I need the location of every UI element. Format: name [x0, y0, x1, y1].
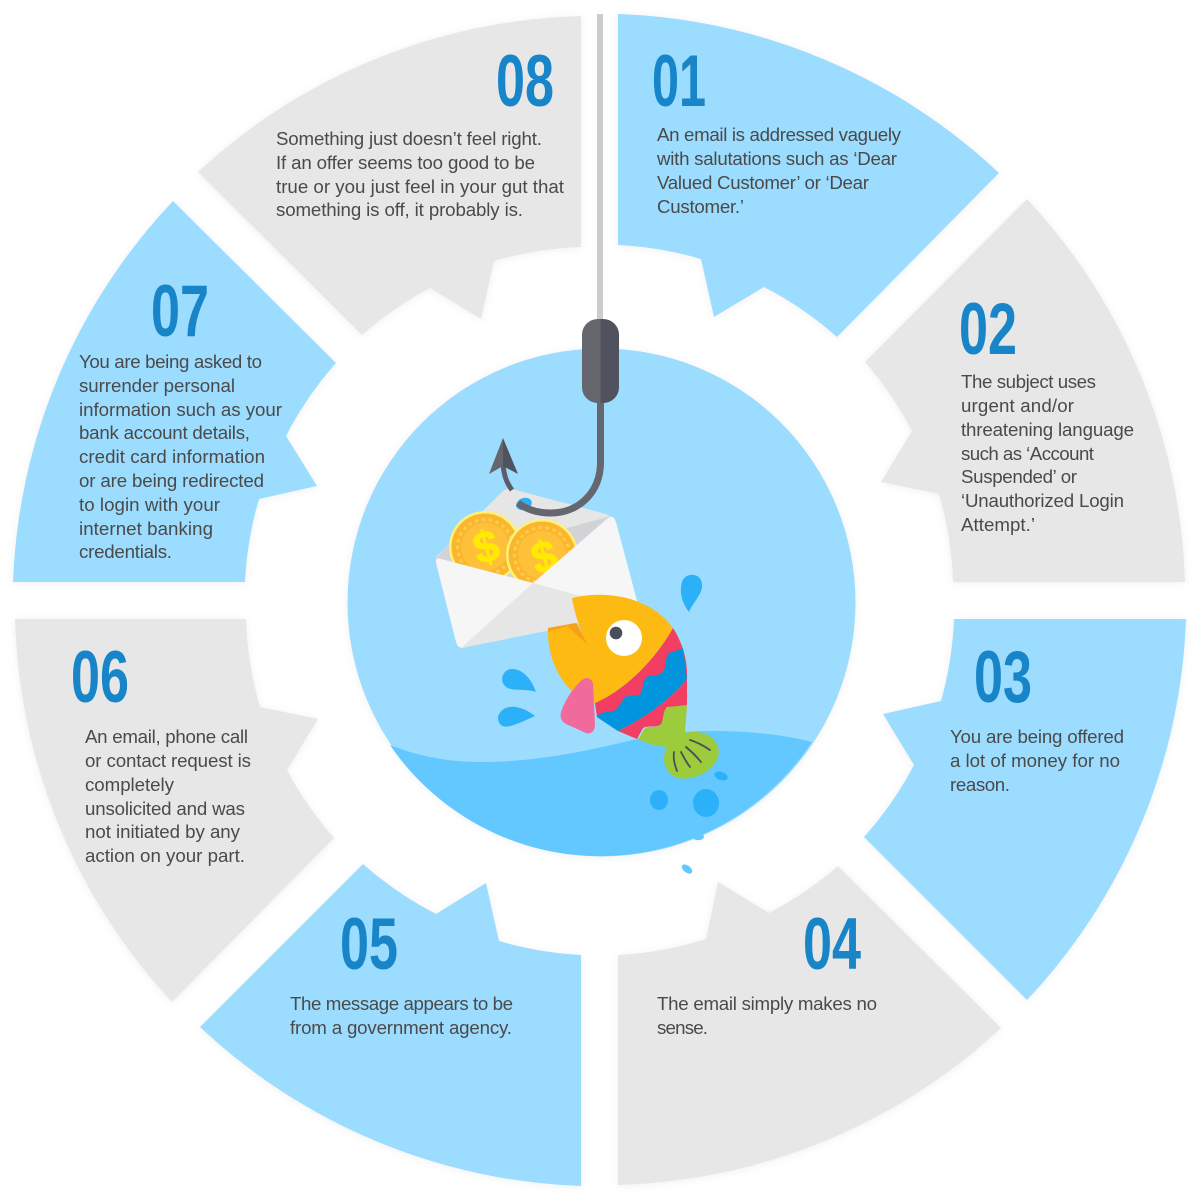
envelope [436, 489, 640, 648]
hook [489, 319, 619, 513]
text 02: The subject uses [961, 371, 1096, 392]
text 07: You are being asked to [79, 351, 262, 372]
text 06: completely [85, 774, 175, 795]
text 04: The email simply makes no [657, 993, 877, 1014]
text 01: Valued Customer’ or ‘Dear [657, 172, 869, 193]
segment 06 [15, 619, 334, 1002]
number 03: 03 [974, 637, 1032, 718]
number 05: 05 [340, 904, 398, 985]
envelope inside shade [436, 516, 611, 583]
text 07: or are being redirected [79, 470, 264, 491]
text 07: surrender personal [79, 375, 235, 396]
text 06: not initiated by any [85, 821, 241, 842]
water [390, 731, 812, 856]
text 05: from a government agency. [290, 1017, 512, 1038]
number 01: 01 [652, 41, 706, 122]
text 08: true or you just feel in your gut that [276, 176, 565, 197]
coins [449, 511, 576, 583]
coin 2: $ [526, 531, 563, 584]
panel: 06 [15, 619, 334, 1002]
hole in envelope [514, 496, 534, 512]
text 03: reason. [950, 774, 1010, 795]
number 08: 08 [496, 41, 554, 122]
text 06 [85, 726, 251, 866]
text 07: to login with your [79, 494, 220, 515]
text 04: sense. [657, 1017, 708, 1038]
text 06: action on your part. [85, 845, 245, 866]
envelope back [436, 489, 636, 648]
body and tail green [638, 705, 719, 779]
panel: 05 [200, 864, 581, 1186]
text 07 [79, 351, 282, 562]
text 05: The message appears to be [290, 993, 513, 1014]
number 02: 02 [959, 289, 1017, 370]
coin 1: $ [468, 521, 505, 574]
text 08: Something just doesn’t feel right. [276, 128, 542, 149]
text 05 [290, 993, 513, 1038]
text 07: internet banking [79, 518, 213, 539]
text 02: Attempt.’ [961, 514, 1035, 535]
segment 01 [618, 14, 999, 337]
eye [606, 620, 642, 656]
text 03 [950, 726, 1124, 795]
segment 03 [864, 619, 1186, 1000]
pupil [610, 627, 622, 639]
tongue [561, 678, 595, 733]
number 07: 07 [151, 271, 209, 352]
body lower red band [618, 679, 687, 739]
droplet top right [681, 575, 702, 612]
water droplets [498, 575, 729, 875]
panel: 03 [864, 619, 1186, 1000]
envelope front [436, 517, 640, 648]
splash drops [650, 790, 668, 810]
panel: 02 [865, 199, 1185, 582]
droplet left lower [498, 707, 535, 727]
droplet left upper [502, 669, 536, 692]
text 07: information such as your [79, 399, 282, 420]
text 07: credentials. [79, 541, 172, 562]
text 02: threatening language [961, 419, 1134, 440]
number 04: 04 [803, 904, 861, 985]
text 02: urgent and/or [961, 395, 1074, 416]
text 08: something is off, it probably is. [276, 199, 523, 220]
text 02: Suspended’ or [961, 466, 1077, 487]
rope [597, 14, 603, 324]
text 01 [656, 124, 902, 217]
body blue band [597, 648, 687, 731]
text 02: such as ‘Account [961, 443, 1095, 464]
segment 05 [200, 864, 581, 1186]
text 01: Customer.’ [657, 196, 744, 217]
text 08 [276, 128, 565, 220]
text 03: a lot of money for no [950, 750, 1120, 771]
text 02: ‘Unauthorized Login [961, 490, 1124, 511]
segment 07 [13, 201, 336, 582]
panel: 07 [13, 201, 336, 582]
number 06: 06 [71, 637, 129, 718]
text 08: If an offer seems too good to be [276, 152, 535, 173]
text 04 [657, 993, 877, 1038]
segment 08 [198, 16, 581, 335]
central illustration [348, 319, 856, 875]
text 03: You are being offered [950, 726, 1124, 747]
text 06: unsolicited and was [85, 798, 245, 819]
hook line [518, 400, 600, 513]
barb head [489, 438, 503, 474]
body upper red band [595, 628, 687, 731]
text 01: with salutations such as ‘Dear [656, 148, 897, 169]
hook barb stem [503, 464, 512, 490]
segment 04 [618, 866, 1001, 1185]
panel: 01 [618, 14, 999, 337]
text 06: or contact request is [85, 750, 251, 771]
hook sinker [582, 319, 600, 403]
inner mouth [548, 623, 588, 645]
tail lines [674, 740, 710, 771]
text 02 [961, 371, 1134, 535]
panel: 04 [618, 866, 1001, 1185]
text 07: credit card information [79, 446, 265, 467]
text 06: An email, phone call [85, 726, 248, 747]
text 01: An email is addressed vaguely [657, 124, 902, 145]
envelope lower flap [461, 583, 640, 648]
head [548, 595, 673, 703]
panel: 08 [198, 16, 581, 335]
fish [548, 595, 719, 779]
segment 02 [865, 199, 1185, 582]
circle: sky [348, 348, 856, 856]
text 07: bank account details, [79, 422, 250, 443]
